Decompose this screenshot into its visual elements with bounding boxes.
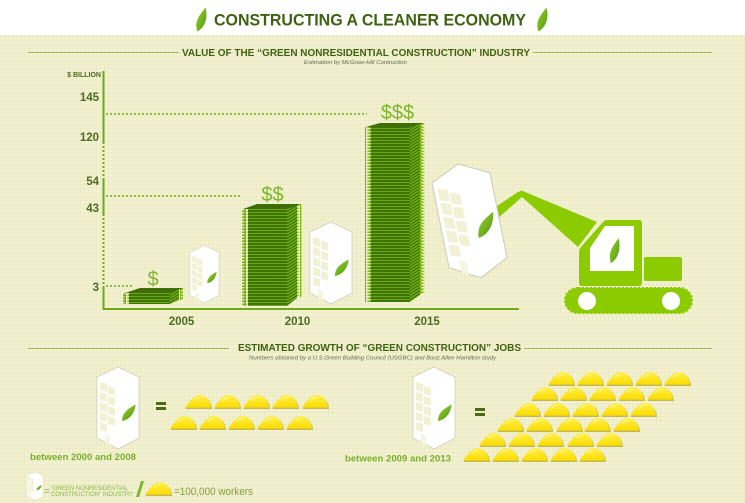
y axis labels: 54 xyxy=(86,176,100,188)
track wheel right xyxy=(662,292,680,310)
period label: between 2000 and 2008 xyxy=(30,452,136,463)
icon: cab leaf xyxy=(610,238,620,263)
source note: Estimation by McGraw-Hill Contruction xyxy=(304,60,407,66)
icon: legend helmet xyxy=(145,482,172,496)
title text: CONSTRUCTING A CLEANER ECONOMY xyxy=(214,10,526,30)
icon: legend building xyxy=(27,472,43,500)
excavator arm xyxy=(494,190,597,247)
icon: left leaf xyxy=(196,8,207,32)
bar: 2015 xyxy=(365,123,424,302)
source note: Numbers obtained by a U.S.Green Building Council (USGBC) and Booz Allen Hamilton study xyxy=(249,356,497,362)
legend building label xyxy=(44,485,133,498)
heading: jobs growth xyxy=(28,343,712,362)
y axis xyxy=(102,71,104,309)
y axis labels xyxy=(67,72,101,294)
helmets row 3 xyxy=(514,403,657,417)
dollar signs: $ xyxy=(147,268,159,290)
period label: between 2009 and 2013 xyxy=(345,454,451,464)
bar: 2010 xyxy=(242,204,302,306)
panel: jobs 2009-2013 xyxy=(345,367,691,464)
y axis labels: $ BILLION xyxy=(67,72,101,79)
dollar signs: $$$ xyxy=(381,102,414,124)
helmets row 2 xyxy=(531,387,674,401)
equals sign xyxy=(156,402,166,410)
icon: tilted large building xyxy=(429,159,510,283)
title xyxy=(196,8,548,32)
y axis labels: 120 xyxy=(80,132,99,144)
heading text: VALUE OF THE “GREEN NONRESIDENTIAL CONSTRUCTION” INDUSTRY xyxy=(182,48,531,59)
icon: right leaf xyxy=(537,8,548,32)
excavator lifting building xyxy=(429,159,692,313)
engine block xyxy=(644,257,682,281)
legend xyxy=(27,472,253,500)
helmets row 2 xyxy=(170,416,313,430)
year labels: 2005 xyxy=(169,316,195,328)
y axis labels: 43 xyxy=(86,203,99,215)
equals sign xyxy=(475,408,485,416)
icon: medium building 2010 xyxy=(310,222,352,304)
track wheel left xyxy=(578,292,596,310)
panel: jobs 2000-2008 xyxy=(30,367,329,463)
legend building label: “GREEN NONRESIDENTIAL xyxy=(51,485,129,492)
helmets row 1 xyxy=(548,372,691,386)
icon: building xyxy=(413,367,455,449)
year labels xyxy=(169,316,440,328)
y axis labels: 145 xyxy=(80,92,100,104)
year labels: 2010 xyxy=(285,316,310,328)
heading: value of the industry xyxy=(28,48,712,66)
legend building label: CONSTRUCTION” INDUSTRY xyxy=(51,491,133,498)
legend helmet label: =100,000 workers xyxy=(174,486,253,498)
x axis xyxy=(102,308,519,310)
bar: 2005 xyxy=(123,288,183,304)
helmets row 6 xyxy=(463,448,606,462)
icon: small building 2005 xyxy=(190,246,219,303)
icon: building xyxy=(97,367,139,449)
y axis labels: 3 xyxy=(93,282,99,294)
helmets row 4 xyxy=(497,418,640,432)
cab window xyxy=(590,226,634,271)
bar chart: green construction value xyxy=(67,71,519,328)
slash separator xyxy=(136,481,144,497)
dollar signs xyxy=(147,102,414,290)
dotted guide lines xyxy=(106,114,367,286)
dollar signs: $$ xyxy=(261,184,284,206)
caterpillar track xyxy=(565,288,692,313)
legend building label: = xyxy=(44,486,50,498)
helmets row 1 xyxy=(185,395,329,409)
excavator cab xyxy=(579,220,642,286)
heading text: ESTIMATED GROWTH OF “GREEN CONSTRUCTION” JOBS xyxy=(238,343,522,354)
helmets row 5 xyxy=(479,433,623,447)
year labels: 2015 xyxy=(414,316,440,328)
